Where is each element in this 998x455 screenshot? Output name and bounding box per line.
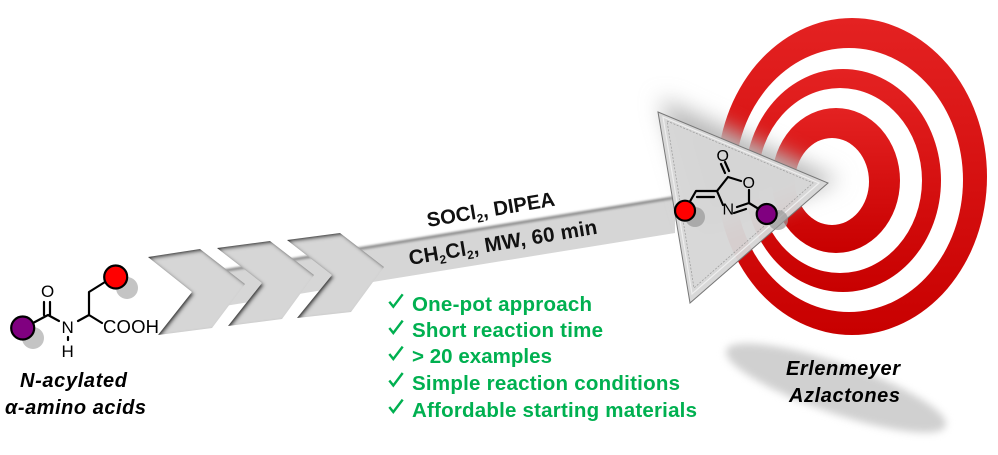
left molecule: N-acylated amino acid: O xyxy=(41,282,54,301)
reaction conditions top: SOCl xyxy=(425,202,478,232)
label: starting material: α-amino acids xyxy=(5,397,146,419)
item: affordable materials: Affordable starting materials xyxy=(412,399,697,422)
right molecule: azlactone: O xyxy=(742,175,755,192)
chevron 1 xyxy=(148,249,245,335)
chevron 3 xyxy=(287,233,384,318)
arrow shaft xyxy=(200,196,675,310)
right molecule: azlactone xyxy=(675,148,788,230)
label: product xyxy=(786,358,901,407)
item: one-pot: One-pot approach xyxy=(412,293,592,316)
benefits checklist xyxy=(389,293,697,422)
red substituent xyxy=(104,266,127,288)
label: product: Erlenmeyer xyxy=(786,358,901,380)
left molecule: N-acylated amino acid: N xyxy=(62,318,74,337)
left molecule: N-acylated amino acid: COOH xyxy=(103,316,159,337)
item: simple conditions: Simple reaction conditions xyxy=(412,372,680,395)
purple substituent xyxy=(757,204,777,224)
left molecule: N-acylated amino acid xyxy=(11,266,159,361)
arrow head triangle xyxy=(658,112,828,303)
triangle shadow xyxy=(660,98,840,235)
reaction conditions bottom: , MW, 60 min xyxy=(471,216,599,259)
reaction conditions top: , DIPEA xyxy=(481,189,557,223)
reaction conditions bottom: 2 xyxy=(439,252,448,267)
red substituent xyxy=(675,201,695,221)
chevrons of the arrow tail xyxy=(148,233,384,335)
reaction conditions bottom: Cl xyxy=(444,238,468,264)
reaction conditions bottom: CH xyxy=(407,242,441,270)
reaction conditions bottom: 2 xyxy=(466,247,475,262)
label: starting material: N-acylated xyxy=(20,370,128,392)
purple substituent xyxy=(11,316,34,340)
label: starting material xyxy=(5,370,146,419)
chevron 2 xyxy=(217,241,314,326)
item: short time: Short reaction time xyxy=(412,319,603,342)
reaction conditions top: 2 xyxy=(476,211,485,226)
right molecule: azlactone: N xyxy=(722,202,734,218)
left molecule: N-acylated amino acid: H xyxy=(62,342,74,361)
target: concentric red rings xyxy=(717,18,987,335)
label: product: Azlactones xyxy=(788,385,900,407)
item: examples: > 20 examples xyxy=(412,345,552,368)
ground shadow of target xyxy=(718,327,954,449)
right molecule: azlactone: O xyxy=(716,148,729,165)
